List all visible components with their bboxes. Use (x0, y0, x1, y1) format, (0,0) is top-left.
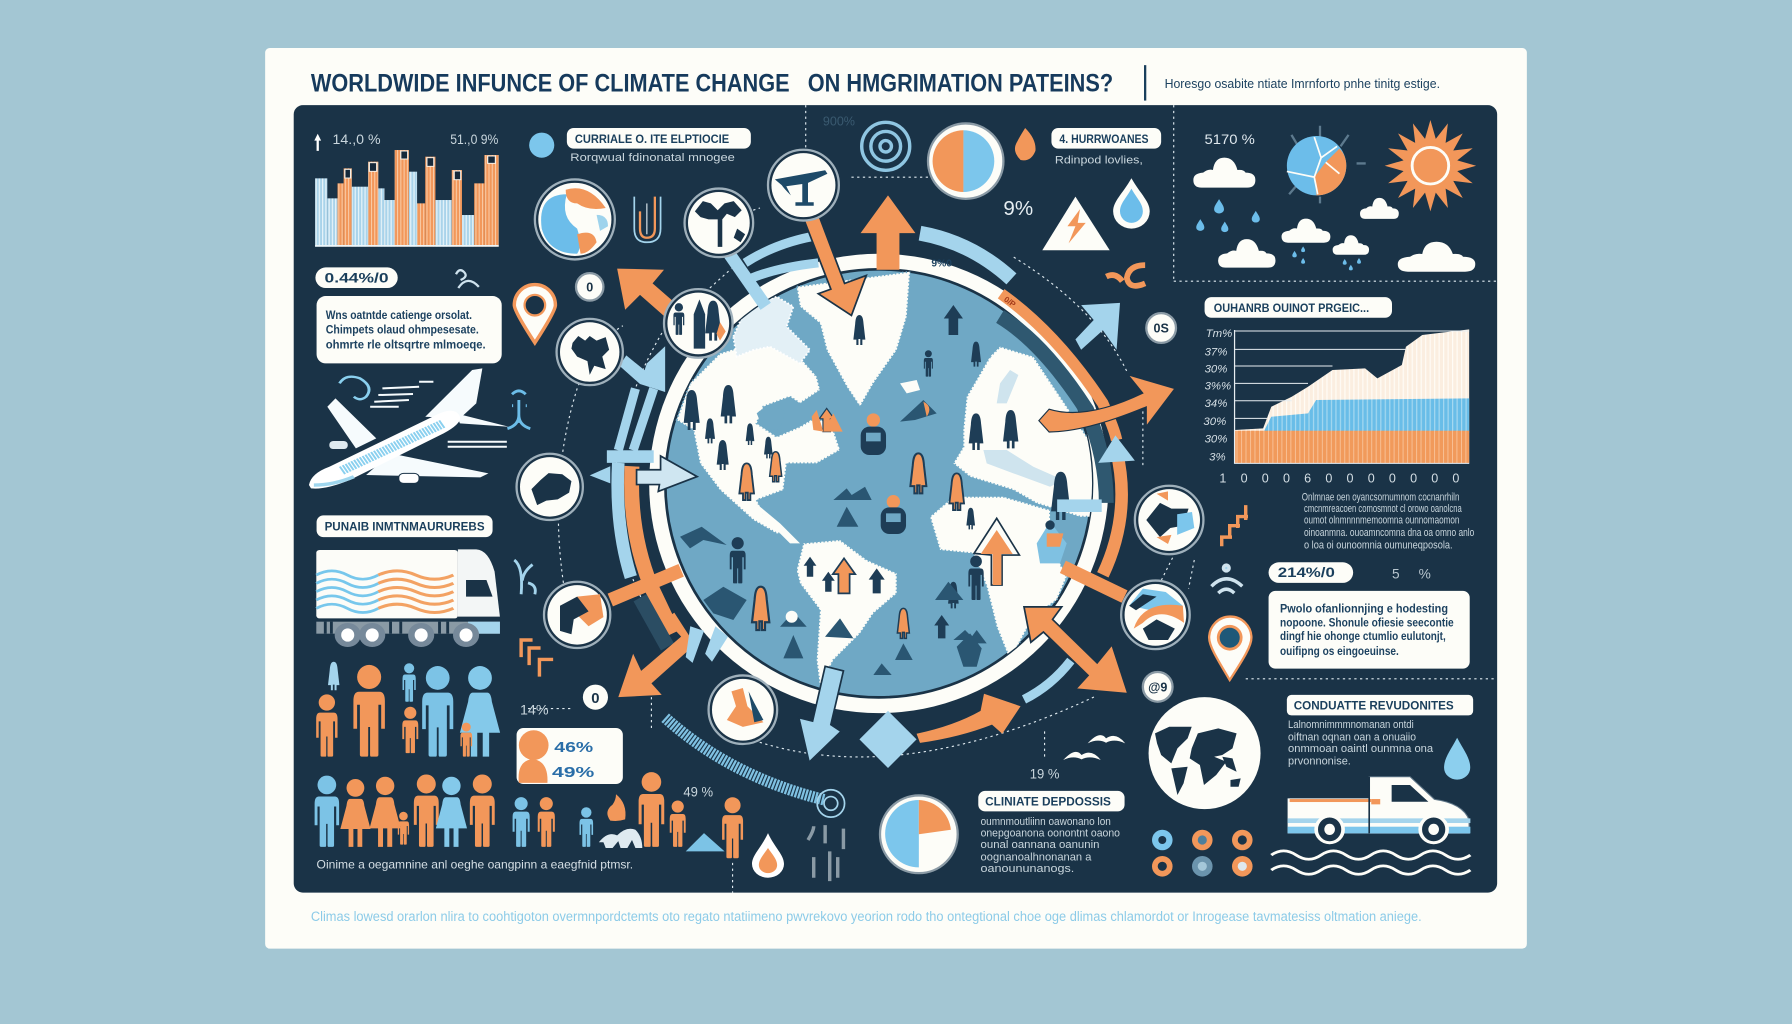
area chart y axis labels: 3% (1209, 452, 1226, 464)
land: central america (757, 507, 800, 543)
arrow: orange right along bottom (917, 694, 1021, 743)
arc: lower right light blue band (1024, 661, 1071, 699)
connector: palm circle to ring (729, 254, 766, 306)
arc: top-left light blue bands (745, 235, 818, 279)
ring strips: lower left light blue (686, 626, 728, 663)
area chart y axis labels: 3%% (1205, 381, 1231, 393)
callout: people text box (1269, 591, 1470, 669)
ring label: orange tag: 0/P (1002, 295, 1018, 309)
paragraph: climate responses: oanoununanogs. (981, 863, 1074, 875)
badge: lower right: @9 (1148, 680, 1167, 694)
icon: orange zig marks (1222, 505, 1248, 546)
pickup truck (1288, 777, 1470, 843)
footer text: Climas lowesd orarlon nlira to coohtigoton overmnpordctemts oto regato ntatiimeno pwvrekovo yeorion rodo tho ontegtional choe oge dlimas chlamordot or Inrogease tavmatesiss oltmation aniege. (311, 909, 1422, 924)
land: hudson bay (756, 409, 762, 418)
icon: map pin right (1209, 617, 1251, 680)
paragraph: adaptation: Lalnomnimmmnomanan ontdi (1288, 719, 1414, 731)
bar chart value labels: 14.,0 % (333, 132, 381, 147)
area chart y axis labels: Tm% (1206, 328, 1232, 340)
caption: top centre: Rorqwual fdinonatal mnogee (570, 152, 735, 164)
circle: land and sky (1121, 581, 1190, 649)
icon: flame (1015, 128, 1036, 160)
paragraph: adaptation (1288, 719, 1434, 768)
badge: top left marker: 0 (586, 280, 593, 294)
icon: concentric swirl (862, 122, 910, 170)
paragraph: area chart notes: cmcnmreacoen comosmnot cl orowo oanolcna (1304, 503, 1462, 515)
bar chart value labels (314, 132, 498, 151)
paragraph: climate responses: ounal oannana oanunin (981, 839, 1099, 851)
airplane illustration (309, 368, 509, 489)
icon: light blue diamond (859, 711, 917, 768)
label: 14%: 14% (520, 702, 549, 717)
pill: top centre heading (567, 128, 751, 149)
arc: top-right light blue band (920, 233, 1011, 279)
pill: 21.4%: 214%/0 (1278, 565, 1335, 580)
icon: squiggle (456, 270, 479, 288)
header divider (1144, 65, 1146, 101)
circle: dark blot (557, 319, 623, 385)
paragraph: adaptation: prvonnonise. (1288, 756, 1351, 768)
arrow: orange curved right (1039, 375, 1175, 432)
land: africa (930, 497, 1067, 660)
label: 19%: 19 % (1030, 766, 1059, 781)
pill: adaptation heading: CONDUATTE REVUDONITES (1294, 699, 1454, 713)
icon: fountain (507, 391, 530, 429)
arc: right orange band (1001, 294, 1117, 440)
migrant figures on map (684, 305, 1070, 638)
area chart y axis labels: 37% (1205, 346, 1227, 358)
bar chart: top left (315, 150, 499, 247)
icon: right badge 0S: 0S (1153, 322, 1169, 336)
badge: lower left zero: 0 (591, 691, 600, 707)
land: greenland (797, 272, 910, 407)
badge: lower left zero (583, 685, 608, 710)
arrow: orange connector from lower left circle (610, 570, 681, 600)
pill: climate responses heading: CLINIATE DEPDOSSIS (985, 795, 1111, 809)
bar chart value labels: 51.,0 9% (450, 132, 498, 147)
land: north america (677, 343, 840, 533)
arrow: orange down from plane circle (803, 214, 866, 315)
stat card: 46% and 49%: 49% (552, 765, 594, 781)
arrow: orange down-left (618, 613, 695, 697)
arrow: light blue right (637, 456, 697, 491)
arrow: left small triangle (590, 466, 610, 483)
callout: people text box: nopoone. Shonule ofiesie seecontie (1280, 615, 1454, 629)
orange figures on map (739, 408, 964, 638)
ring label: 9%: 9%0 (931, 258, 952, 269)
label: 51%: 5170 % (1205, 132, 1255, 147)
label: 9%: 9% (1003, 197, 1033, 220)
paragraph: area chart notes: oumot olnmnnnmemoomna ounnomaomon (1304, 514, 1459, 526)
weather: sun (1385, 120, 1476, 211)
connector: right light blue block (1057, 499, 1102, 512)
globe ring (649, 254, 1109, 713)
weather: rain drops (1196, 199, 1361, 270)
paragraph: area chart notes (1302, 492, 1474, 552)
circle: top pie chart (928, 123, 1003, 199)
paragraph: climate responses: onepgoanona oonontnt oaono (981, 828, 1120, 840)
callout: people text box: Pwolo ofanlionnjing e hodesting (1280, 602, 1448, 616)
area chart y axis labels: 30% (1205, 433, 1227, 445)
paragraph: adaptation: onmmoan oaintl ounmna ona (1288, 743, 1434, 755)
icon: u-tube (634, 197, 661, 242)
stat card: 46% and 49%: 46% (554, 740, 593, 756)
truck label pill (317, 515, 493, 537)
circle: palm tree (685, 189, 753, 257)
label: 5%: 5 % (1392, 566, 1431, 581)
arrow: orange connector right (1063, 567, 1125, 597)
arrow: light blue bent up (619, 346, 665, 392)
badge: lower right (1143, 672, 1173, 702)
arc: lower left slate band (640, 598, 667, 647)
backpack traveller icons (861, 413, 906, 534)
area chart y axis labels: 30% (1203, 416, 1226, 428)
caption: hurricanes: Rdinpod lovlies, (1055, 154, 1143, 166)
area chart (1235, 329, 1469, 463)
area chart x axis labels: 1 0 0 0 6 0 0 0 0 0 0 0 (1219, 471, 1459, 485)
icon: plant sprig (514, 560, 535, 594)
icon: blue circle badge (529, 133, 554, 158)
area chart y axis labels: 30% (1205, 364, 1227, 376)
icon: orange corner marks (521, 640, 553, 677)
arrow: light blue triangle (1098, 435, 1135, 463)
icon: map pin left (514, 285, 555, 343)
circle: airplane (768, 150, 839, 221)
mini icon grid (1152, 830, 1253, 877)
pill: hurricanes heading: 4. HURRWOANES (1059, 132, 1149, 146)
callout: climate text: Chimpets olaud ohmpesesate. (326, 323, 479, 337)
arrow: orange up in map (974, 518, 1019, 585)
stat card: 46% and 49% (517, 728, 623, 784)
arrow: orange double headed (1024, 607, 1128, 694)
weather: cracked earth globe (1287, 126, 1366, 203)
arc: left orange band (632, 466, 673, 633)
icon: right badge 0S (1146, 313, 1176, 343)
dark main panel (294, 105, 1497, 893)
paragraph: climate responses (981, 816, 1120, 875)
callout: people text box: dingf hie ohonge ctumlio eulutonjt, (1280, 629, 1446, 643)
land: inland seas (983, 370, 1063, 487)
orange accents on map (812, 402, 929, 432)
truck illustration (316, 549, 500, 644)
poster card (265, 48, 1527, 949)
circle: dark map (517, 454, 583, 520)
map globe (665, 269, 1100, 697)
pill: top centre heading: CURRIALE O. ITE ELPTIOCIE (575, 132, 729, 146)
people row: upper group (316, 662, 500, 757)
circle: small globe (535, 179, 615, 259)
circle: migrants (664, 289, 733, 358)
icon: signal person (1211, 565, 1242, 593)
pill: hurricanes heading (1051, 128, 1161, 149)
bar: light blue T piece (607, 450, 654, 463)
arc: left upper light blue bands (618, 389, 654, 450)
circle: flame figure (709, 675, 777, 744)
arrow: orange up-left (617, 269, 679, 320)
icon: blue water drop (1444, 738, 1470, 780)
waves under truck (1271, 851, 1470, 874)
faint label: 900%: 900% (823, 115, 855, 129)
icon: water drop with flame (752, 833, 784, 878)
icon: water drop (1113, 178, 1150, 229)
weather: clouds (1193, 158, 1475, 272)
icon: birds (1063, 735, 1125, 760)
arrow: orange up at top (861, 195, 915, 270)
icon: orange swirl (1106, 265, 1145, 286)
people row: lower group (315, 772, 743, 858)
circle: continent with orange (544, 582, 610, 648)
paragraph: area chart notes: Onlmnae oen oyancsornumnom cocnanrhiln (1302, 492, 1459, 504)
paragraph: area chart notes: o loa oi ounoomnia oumuneqposola. (1304, 540, 1453, 552)
pill: area chart heading (1205, 297, 1392, 318)
title: WORLDWIDE INFUNCE OF CLIMATE CHANGE ON HMGRIMATION PATEINS? (311, 69, 1113, 97)
pill: 21.4% (1269, 562, 1353, 583)
icon: warning triangle (1042, 197, 1110, 250)
callout: climate text (317, 296, 502, 363)
circle: bottom pie chart (880, 795, 958, 873)
land: iceland (900, 380, 920, 393)
circle: world globe (1149, 697, 1261, 809)
icon: small silhouettes (808, 825, 843, 881)
weather panel (1193, 120, 1476, 272)
circle: tree landscape (1135, 486, 1203, 554)
label: 49%: 49 % (683, 785, 713, 800)
land: arctic islands (733, 297, 810, 363)
land: eurasia (953, 347, 1100, 517)
arrow: light blue up-right (1075, 303, 1120, 350)
arc: right lower orange band (1103, 451, 1122, 575)
pill: adaptation heading (1287, 695, 1473, 715)
area chart y axis labels: 34% (1205, 398, 1227, 410)
truck label pill: PUNAIB INMTNMAURUREBS (325, 519, 485, 533)
paragraph: adaptation: oiftnan oqnan oan a onuaiio (1288, 732, 1416, 744)
callout: climate text: Wns oatntde catienge orsolat. (326, 308, 472, 322)
mountain and shelter icons (680, 400, 1067, 675)
area chart y axis labels (1203, 328, 1232, 464)
paragraph: climate responses: oognanoalhnonanan a (981, 852, 1092, 864)
people caption: Oinime a oegamnine anl oeghe oangpinn a eaegfnid ptmsr. (317, 858, 633, 872)
arc: left light blue band (618, 463, 631, 577)
percentage pill (315, 267, 398, 288)
callout: people text box: ouifipng os eingoeuinse. (1280, 644, 1399, 658)
land: south america (797, 540, 897, 687)
hose band leading to target (665, 718, 845, 817)
paragraph: area chart notes: oinoanmna. ouoamncomna dna oa omno anlo (1304, 527, 1474, 539)
pill: climate responses heading (978, 791, 1125, 811)
arc: right slate band (1000, 317, 1106, 503)
callout: climate text: ohmrte rle oltsqrtre mlmoeqe. (326, 338, 486, 352)
subtitle: Horesgo osabite ntiate Imrnforto pnhe tinitg estige. (1165, 76, 1440, 91)
dotted guide lines (528, 105, 1497, 893)
badge: top left marker (576, 273, 603, 301)
paragraph: climate responses: oumnmoutliinn oawonano lon (981, 816, 1111, 828)
arrow: light blue down (799, 666, 843, 762)
percentage pill: 0.44%/0 (325, 270, 389, 285)
pill: area chart heading: OUHANRB OUINOT PRGEIC... (1214, 301, 1369, 315)
